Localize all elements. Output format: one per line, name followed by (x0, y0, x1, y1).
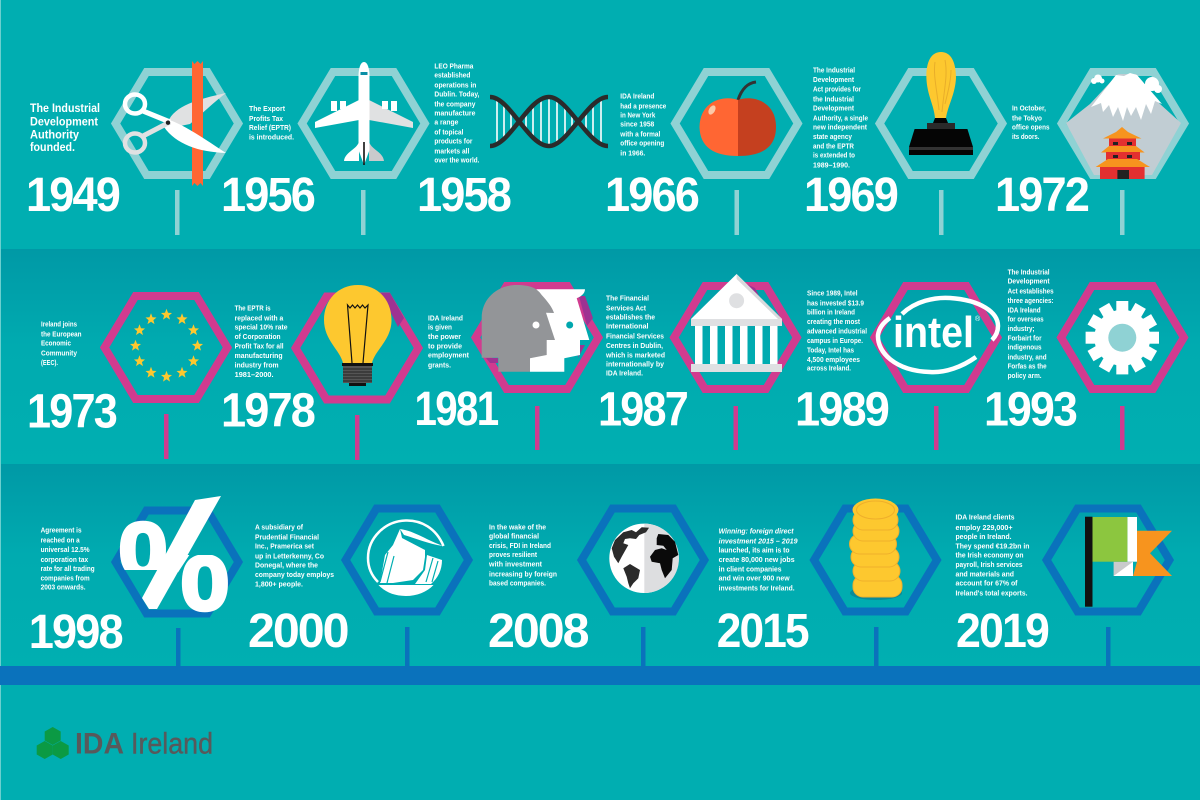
text block: Forfas as the (1008, 362, 1047, 371)
text block: IDA Ireland. (606, 369, 643, 378)
connector (176, 628, 180, 666)
text block: corporation tax (41, 555, 89, 564)
panel: 1993 (984, 267, 1184, 450)
text block: companies from (41, 574, 90, 583)
text block: Act establishes (1008, 286, 1054, 295)
text block: create 80,000 new jobs (719, 555, 795, 564)
text block (41, 526, 95, 592)
text block: products for (434, 137, 472, 146)
text block: global financial (489, 532, 539, 541)
text block: its doors. (1012, 132, 1040, 141)
text block (605, 293, 665, 378)
icon: Intel logo: intel (893, 308, 974, 357)
icon: Intel logo: ® (975, 315, 981, 323)
text block: state agency (813, 132, 853, 141)
text block: Act provides for (813, 85, 861, 94)
connector (734, 190, 739, 235)
icon: Prudential rock (368, 520, 444, 596)
text block: 1981–2000. (235, 370, 274, 379)
text block (619, 92, 666, 157)
icon: two heads (482, 285, 593, 372)
text block: office opens (1012, 123, 1050, 132)
text block: increasing by foreign (489, 570, 557, 579)
text block: Dublin. Today, (434, 89, 479, 98)
text block: company today employs (255, 570, 334, 579)
text block: payroll, Irish services (956, 560, 1022, 569)
text block: of topical (434, 127, 463, 136)
panel: 1972 (995, 72, 1184, 235)
hexagon (346, 508, 468, 612)
text block: industry from (235, 361, 279, 370)
connector (874, 627, 878, 666)
text block: They spend €19.2bn in (956, 542, 1030, 551)
text block: 4,500 employees (807, 355, 860, 364)
text block: establishes the (606, 312, 655, 321)
text block (249, 104, 294, 142)
connector (175, 190, 180, 235)
year: 2015 (717, 605, 809, 658)
text block: up in Letterkenny, Co (255, 552, 324, 561)
year: 1958 (417, 169, 511, 222)
text block: Since 1989, Intel (807, 288, 858, 297)
connector (361, 190, 366, 235)
hexagon (296, 296, 418, 400)
text block: Development (30, 116, 98, 128)
text block: Winning: foreign direct (719, 527, 794, 536)
text block: people in Ireland. (956, 532, 1012, 541)
icon: Irish flag (1085, 517, 1172, 607)
hexagon (105, 296, 227, 399)
text block: The Export (249, 104, 285, 113)
text block: Ireland joins (41, 320, 77, 329)
text block: industry; (1008, 324, 1035, 333)
text block (30, 103, 100, 154)
text block: employment (428, 351, 469, 360)
text block: Relief (EPTR) (249, 123, 291, 132)
year: 2000 (248, 605, 348, 658)
year: 1998 (29, 606, 123, 659)
text block: manufacturing (235, 351, 283, 360)
connector (355, 415, 360, 460)
text block (434, 62, 479, 165)
text block: investment 2015 – 2019 (719, 536, 798, 545)
connector (535, 406, 540, 450)
panel: 2019 (956, 508, 1172, 666)
text block: is introduced. (249, 132, 294, 142)
hexagon (1061, 286, 1184, 389)
icon: Intel logo (878, 298, 998, 372)
year: 1966 (605, 169, 698, 222)
text block: and materials and (956, 570, 1014, 579)
text block: Economic (41, 339, 71, 348)
text block: IDA Ireland clients (956, 513, 1014, 522)
text block: In the wake of the (489, 522, 546, 531)
connector (164, 414, 168, 459)
text block: advanced industrial (807, 327, 867, 336)
panel: 1969 (804, 52, 1002, 235)
panel: 1949 (26, 61, 238, 235)
icon: light bulb (324, 285, 404, 386)
text block: in 1966. (620, 148, 645, 157)
icon: DNA helix (490, 97, 608, 146)
text block: Development (813, 75, 854, 84)
text block: with a formal (619, 129, 660, 138)
text block: manufacture (434, 109, 475, 118)
wordmark (75, 728, 213, 760)
year: 1978 (221, 384, 315, 438)
icon: gear (1086, 301, 1159, 374)
year: 2008 (488, 605, 589, 658)
text block: Profit Tax for all (235, 341, 284, 350)
text block: of Corporation (235, 332, 281, 341)
text block: replaced with a (235, 314, 284, 323)
hexagon (1062, 72, 1184, 175)
text block: Centres in Dublin, (606, 341, 663, 350)
icon: classical building (691, 274, 782, 372)
text block: billion in Ireland (807, 308, 855, 317)
text block: Development (1008, 277, 1050, 286)
text block: Authority (30, 129, 80, 141)
connector (1120, 190, 1124, 235)
text block: has invested $13.9 (807, 298, 864, 307)
text block: creating the most (807, 317, 860, 326)
text block: Today, Intel has (807, 346, 854, 355)
hexagon (302, 72, 425, 175)
text block: In October, (1012, 104, 1046, 113)
text block: LEO Pharma (434, 62, 474, 71)
text block: Donegal, where the (255, 561, 318, 570)
text block: for overseas (1008, 315, 1044, 324)
text block (255, 522, 334, 589)
text block (719, 527, 798, 592)
year: 1989 (795, 384, 888, 436)
year: 1973 (27, 386, 116, 438)
text block: special 10% rate (235, 323, 288, 332)
panel: 1966 (605, 72, 798, 235)
connector (734, 406, 738, 450)
text block: across Ireland. (807, 364, 851, 373)
text block: 1,800+ people. (255, 580, 303, 589)
connector (934, 406, 938, 450)
text block: employ 229,000+ (956, 523, 1013, 532)
text block: in client companies (719, 564, 782, 573)
text block: The Financial (606, 293, 649, 302)
text block: the power (428, 332, 461, 341)
text block: to provide (428, 342, 462, 351)
text block: A subsidiary of (255, 522, 303, 531)
text block: based companies. (489, 579, 546, 588)
hexagon (476, 286, 598, 389)
text block: had a presence (620, 102, 666, 111)
connector (939, 190, 944, 235)
text block: the Tokyo (1012, 113, 1042, 122)
panel: 1998 (29, 496, 238, 666)
text block (956, 513, 1030, 598)
text block: IDA Ireland (620, 92, 655, 101)
icon: coin stack (850, 498, 902, 600)
panel: 1987 (598, 274, 797, 450)
panel: 1989 (795, 286, 998, 450)
text block: office opening (620, 139, 665, 148)
text block (813, 65, 868, 169)
text block: operations in (434, 80, 477, 89)
icon: mountain and pagoda (1066, 73, 1181, 179)
text block: (EEC). (41, 358, 58, 367)
text block: Financial Services (606, 332, 664, 341)
text block: is extended to (813, 151, 855, 160)
text block: Services Act (606, 303, 646, 312)
panel: 1973 (27, 296, 227, 459)
text block: Authority, a single (813, 113, 868, 122)
text block: The Industrial (813, 65, 855, 74)
year: 1993 (984, 384, 1076, 436)
text block: Forbairt for (1008, 333, 1042, 342)
text block: 1989–1990. (813, 160, 850, 169)
text block: the Industrial (813, 94, 854, 103)
text block: The Industrial (30, 103, 100, 115)
icon: plane (315, 62, 413, 165)
text block: policy arm. (1008, 371, 1042, 380)
year: 1987 (598, 384, 687, 436)
text block (807, 288, 867, 373)
text block: proves resilient (489, 550, 537, 559)
text block: Community (41, 349, 78, 358)
text block: since 1958 (620, 119, 654, 128)
text block: and the EPTR (813, 142, 854, 151)
panel: 2008 (488, 508, 704, 666)
text block: and win over 900 new (719, 574, 790, 583)
connector (1106, 627, 1110, 666)
text block: rate for all trading (41, 564, 95, 573)
connector (1120, 406, 1124, 450)
hexagon (880, 72, 1002, 175)
text block: Development (813, 104, 854, 113)
year: 1981 (414, 383, 499, 436)
text block: reached on a (41, 536, 80, 545)
text block: Inc., Pramerica set (255, 542, 314, 551)
timeline bar (0, 666, 1200, 685)
icon: percent sign: % (118, 496, 230, 637)
year: 1972 (995, 169, 1088, 222)
text block: is given (428, 323, 452, 332)
text block: over the world. (434, 156, 479, 165)
icon: EU stars (130, 309, 203, 382)
connector (641, 627, 646, 666)
text block: established (434, 70, 471, 79)
text block (428, 313, 469, 370)
year: 2019 (956, 605, 1048, 658)
panel: 1981 (414, 285, 598, 450)
text block: launched, its aim is to (719, 546, 790, 555)
panel: 1956 (221, 62, 425, 235)
text block: Agreement is (41, 526, 82, 535)
text block: grants. (428, 361, 451, 370)
text block: with investment (488, 560, 542, 569)
logo: IDA Ireland (37, 727, 213, 760)
wordmark: IDA (75, 728, 124, 760)
wordmark: Ireland (131, 728, 213, 760)
text block (488, 522, 557, 588)
connector (405, 627, 410, 666)
text block: crisis, FDI in Ireland (489, 541, 551, 550)
text block: account for 67% of (956, 579, 1018, 588)
year: 1956 (221, 169, 314, 222)
text block: Ireland's total exports. (956, 589, 1028, 598)
text block: The Industrial (1008, 267, 1050, 276)
text block: International (606, 321, 648, 330)
text block: Profits Tax (249, 114, 284, 123)
text block: a range (434, 118, 458, 127)
text block: campus in Europe. (807, 336, 863, 345)
hexagon (1047, 508, 1169, 612)
hexagon (814, 508, 937, 612)
text block: universal 12.5% (41, 545, 90, 554)
hexagon (582, 508, 704, 612)
panel: 1978 (221, 285, 418, 460)
text block (1008, 267, 1054, 380)
icon: trophy (909, 52, 973, 155)
text block: three agencies: (1008, 296, 1054, 305)
text block: Prudential Financial (255, 532, 319, 541)
panel: 2000 (248, 508, 468, 666)
panel: 2015 (717, 498, 937, 666)
text block: founded. (30, 142, 75, 154)
text block: indigenous (1008, 343, 1042, 352)
text block (235, 303, 288, 379)
text block: IDA Ireland (428, 313, 463, 322)
panel: 1958 (417, 62, 608, 222)
text block: the Irish economy on (956, 551, 1024, 560)
text block (1012, 104, 1050, 141)
text block: industry, and (1008, 353, 1047, 362)
text block: the company (434, 99, 476, 108)
year: 1969 (804, 169, 897, 222)
text block (41, 320, 82, 367)
icon: scissors and ribbon (125, 61, 226, 186)
text block: new independent (813, 122, 867, 131)
text block: which is marketed (605, 350, 665, 359)
text block: IDA Ireland (1008, 306, 1041, 315)
text block: investments for Ireland. (719, 583, 795, 592)
text block: internationally by (606, 360, 665, 369)
hexagon (674, 286, 797, 389)
hexagon (875, 286, 997, 389)
icon: apple (700, 82, 776, 156)
text block: 2003 onwards. (41, 583, 86, 592)
year: 1949 (26, 169, 119, 222)
text block: The EPTR is (235, 303, 271, 312)
hexagon (675, 72, 798, 175)
text block: in New York (620, 110, 656, 119)
hexagon (116, 72, 238, 175)
hexagon (116, 510, 238, 614)
text block: the European (41, 329, 82, 338)
icon: globe (609, 524, 679, 593)
text block: markets all (434, 146, 469, 155)
icon: three green hexagons (37, 727, 69, 759)
